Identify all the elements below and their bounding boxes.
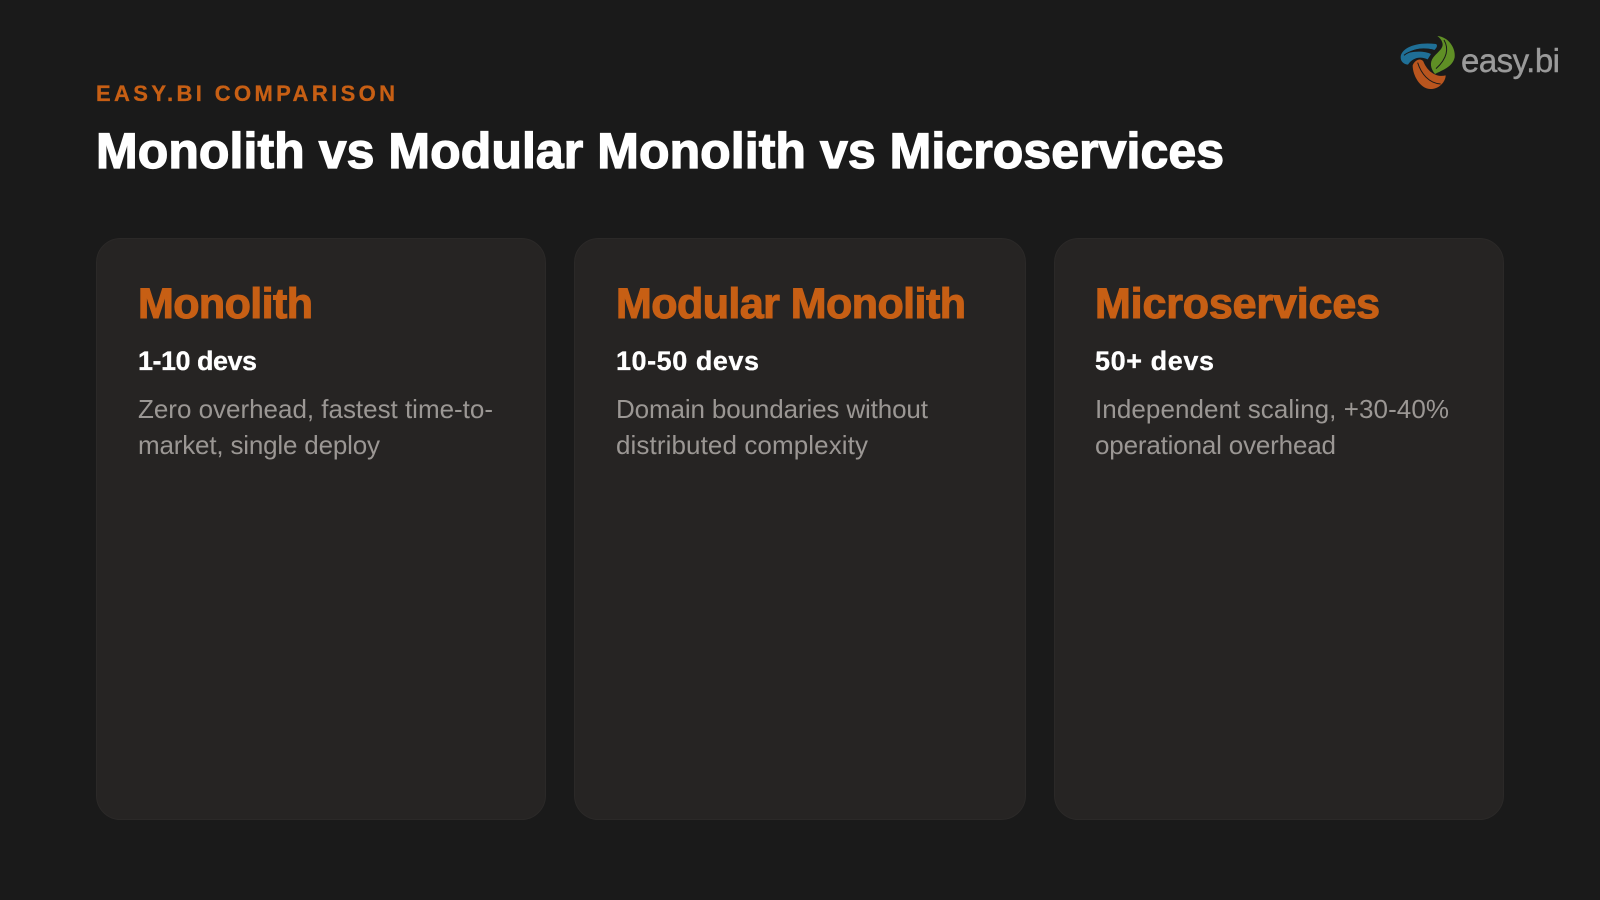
card background	[96, 238, 546, 820]
description: Domain boundaries without	[616, 394, 929, 424]
panel: Microservices	[1054, 238, 1504, 820]
panel: Monolith	[96, 238, 546, 820]
description: Independent scaling, +30-40%	[1095, 394, 1449, 424]
description	[1095, 394, 1449, 460]
card heading: Microservices	[1095, 280, 1380, 328]
card heading: Modular Monolith	[616, 280, 966, 328]
icon: tri-colour swoosh mark	[1401, 36, 1455, 89]
title: Monolith vs Modular Monolith vs Microservices	[96, 123, 1224, 179]
card background	[1054, 238, 1504, 820]
description: distributed complexity	[616, 430, 868, 460]
logo: easy.bi	[1401, 36, 1560, 89]
logo wordmark: easy.bi	[1461, 42, 1560, 79]
team size: 10-50 devs	[616, 346, 759, 376]
description: Zero overhead, fastest time-to-	[138, 394, 493, 424]
team size: 1-10 devs	[138, 346, 257, 376]
description: operational overhead	[1095, 430, 1336, 460]
panel: Modular Monolith	[574, 238, 1026, 820]
description	[616, 394, 929, 460]
team size: 50+ devs	[1095, 346, 1214, 376]
card background	[574, 238, 1026, 820]
card heading: Monolith	[138, 280, 313, 328]
description	[138, 394, 493, 460]
eyebrow label: EASY.BI COMPARISON	[96, 81, 395, 106]
description: market, single deploy	[138, 430, 380, 460]
